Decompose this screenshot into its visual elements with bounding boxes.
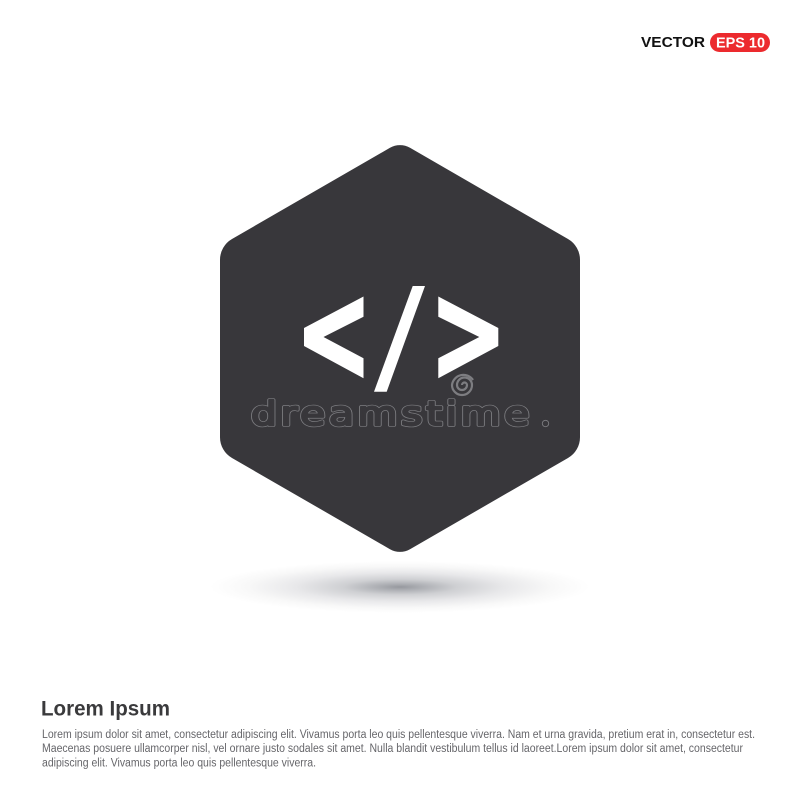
badge: vector eps 10: VECTOR [641,35,706,51]
heading: Lorem Ipsum [41,698,170,720]
watermark wordmark: dreamstime [251,394,533,433]
badge: vector eps 10 [641,33,770,52]
watermark [251,375,549,433]
icon: right angle bracket [438,296,498,378]
watermark registered mark [542,420,549,427]
body text: Maecenas posuere ullamcorper nisl, vel ornare justo sodales sit amet. Nulla blandit vestibulum tellus id laoreet.Lorem ipsum dolor sit amet, consectetur [42,743,743,755]
body text: adipiscing elit. Vivamus porta leo quis pellentesque viverra. [42,758,316,770]
body text [42,729,755,770]
watermark spiral [452,375,473,395]
icon: left angle bracket [304,296,364,378]
ground shadow [210,561,590,613]
icon: slash [374,286,425,392]
hexagon badge [220,145,580,552]
icon: code brackets [304,286,498,392]
badge: vector eps 10: EPS 10 [716,36,765,52]
watermark wordmark: dreamstime [251,394,533,433]
